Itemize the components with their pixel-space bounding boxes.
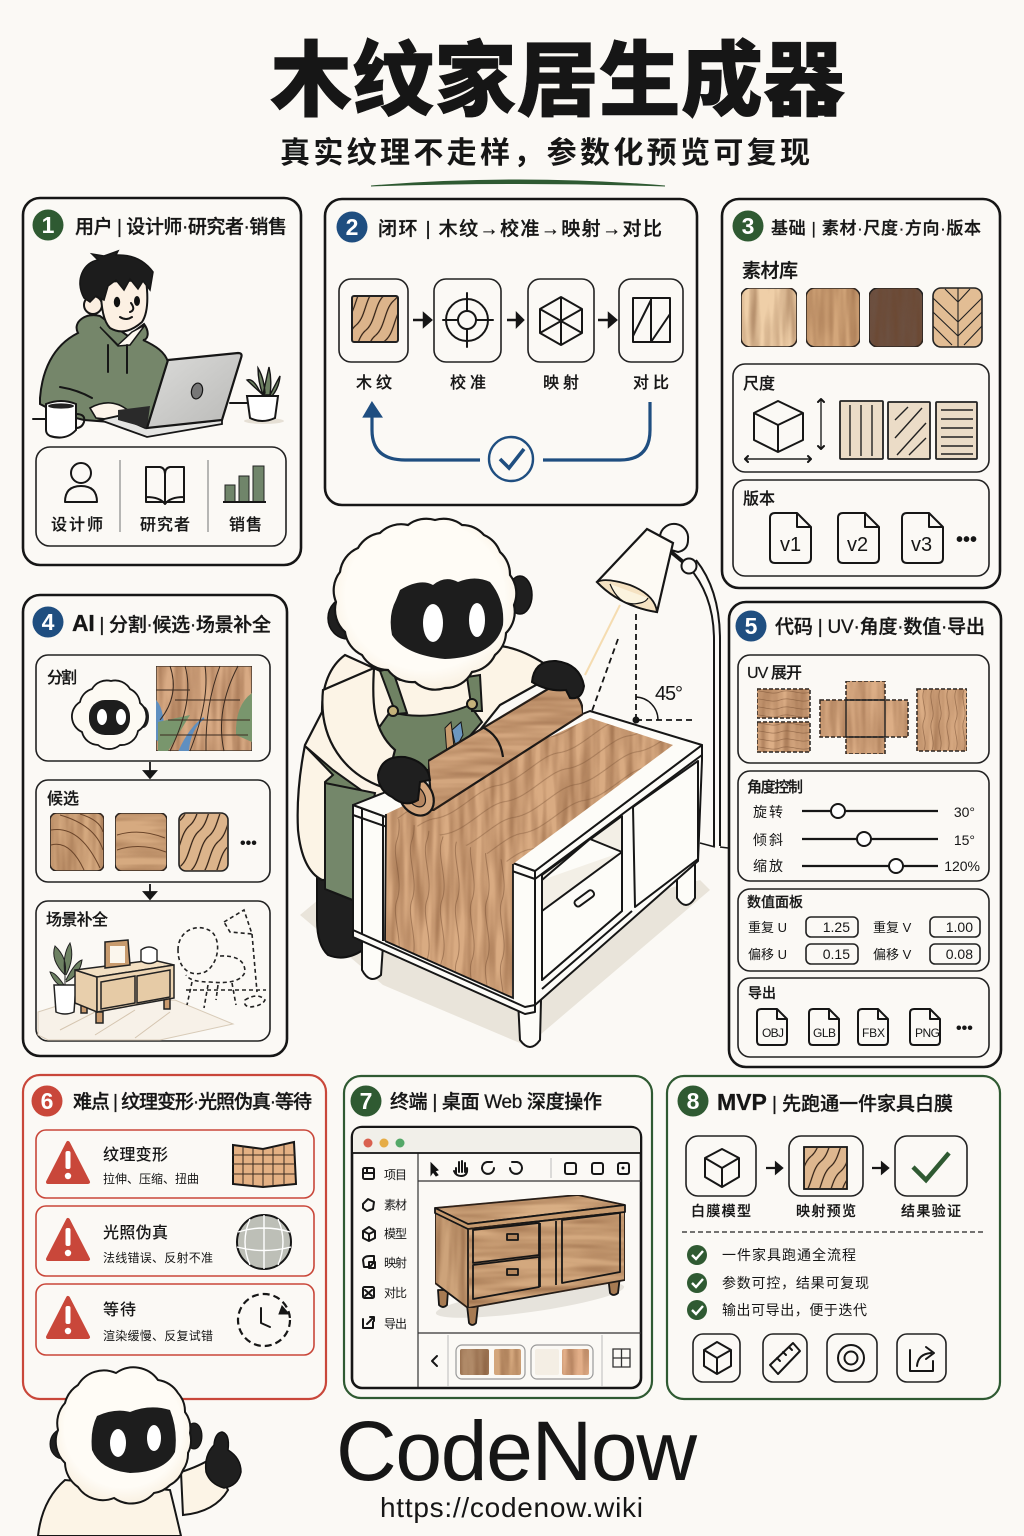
- step: compare: [619, 279, 683, 392]
- badge 2: 2: [346, 214, 358, 240]
- photo frame: [105, 940, 130, 968]
- vase: [141, 947, 157, 964]
- arrow: [766, 1163, 782, 1173]
- angle marker: [592, 614, 695, 724]
- box scene: [36, 901, 270, 1041]
- box angle controls: 30°: [954, 804, 975, 820]
- box UV: [738, 655, 989, 763]
- box export: OBJ: [762, 1026, 784, 1040]
- sidebar: 导出: [384, 1317, 407, 1331]
- checklist: 参数可控，结果可复现: [722, 1275, 869, 1291]
- box numeric: 偏移 V: [873, 947, 912, 962]
- badge 6: [32, 1086, 62, 1116]
- logo: CodeNow: [336, 1404, 697, 1498]
- checklist: 输出可导出，便于迭代: [722, 1302, 867, 1318]
- window dots: [364, 1138, 404, 1148]
- title: 木纹家居生成器: [270, 36, 845, 127]
- sheep ears: [328, 576, 532, 639]
- box segment: 分割: [47, 669, 77, 687]
- box angle controls: 120%: [944, 858, 980, 874]
- row: waiting: 渲染缓慢、反复试错: [103, 1328, 213, 1343]
- heading 1: 用户 | 设计师·研究者·销售: [75, 216, 287, 238]
- sheep head wool: [334, 519, 516, 690]
- arrow: [144, 762, 156, 778]
- box candidates: 候选: [47, 790, 79, 808]
- box numeric: 0.15: [823, 946, 850, 962]
- heading 8: MVP | 先跑通一件家具白膜: [717, 1089, 953, 1115]
- row: fake lighting: 法线错误、反射不准: [103, 1250, 213, 1265]
- step: mapping preview: [789, 1136, 863, 1219]
- row: fake lighting: 光照伪真: [103, 1224, 168, 1242]
- mascot thumb hand: [206, 1432, 241, 1488]
- step: calibrate: [434, 279, 501, 392]
- sidebar: 项目: [384, 1168, 407, 1182]
- mascot face: [92, 1407, 176, 1473]
- material swatches: [741, 288, 982, 347]
- box scene: 场景补全: [46, 910, 108, 929]
- step: map: 映射: [543, 374, 579, 392]
- box export: FBX: [862, 1026, 885, 1040]
- cabinet legs: [362, 850, 695, 1047]
- box numeric: 1.00: [946, 919, 973, 935]
- box candidates: •••: [240, 835, 257, 852]
- plant: [50, 943, 82, 1014]
- badge 8: 8: [687, 1088, 700, 1114]
- box angle controls: [738, 771, 989, 881]
- loop arrow: [365, 402, 650, 460]
- mascot arm: [181, 1458, 228, 1515]
- heading 2: 闭环 | 木纹→校准→映射→对比: [378, 218, 662, 240]
- icon: bars: [223, 466, 266, 502]
- heading 4: AI | 分割·候选·场景补全: [72, 610, 271, 636]
- mascot: thumbs up sheep: [38, 1367, 241, 1536]
- panel 5: code: [729, 602, 1001, 1067]
- badge 7: [350, 1086, 382, 1116]
- step: wood: 木纹: [356, 374, 392, 392]
- box angle controls: 角度控制: [747, 779, 803, 796]
- rug: [38, 1000, 233, 1040]
- box numeric: [738, 889, 989, 971]
- box candidates: [36, 780, 270, 882]
- box UV: UV 展开: [747, 665, 802, 682]
- box export: 导出: [748, 985, 776, 1001]
- box export: GLB: [813, 1026, 836, 1040]
- badge 5: [736, 610, 766, 642]
- step: calibrate: 校准: [450, 373, 486, 392]
- label researcher: 研究者: [140, 515, 190, 534]
- box angle controls: 倾斜: [753, 832, 783, 848]
- cabinet shell: [353, 711, 702, 1047]
- app window: [352, 1127, 641, 1388]
- badge 3: [732, 210, 764, 242]
- toolbar icons: [431, 1161, 629, 1176]
- subtitle: 真实纹理不走样，参数化预览可复现: [280, 137, 810, 170]
- arrow: [144, 884, 156, 899]
- tool buttons: [693, 1334, 946, 1382]
- check circle: [489, 437, 533, 481]
- heading 6: 难点 | 纹理变形·光照伪真·等待: [73, 1091, 312, 1113]
- box angle controls: 缩放: [753, 858, 783, 874]
- step: wood: [339, 279, 408, 392]
- badge 5: 5: [745, 613, 758, 639]
- badge 7: 7: [360, 1088, 372, 1114]
- step: compare: 对比: [633, 374, 669, 392]
- wood veneer: [384, 718, 673, 1000]
- sheep hand lower: [378, 757, 430, 803]
- box versions: 版本: [743, 490, 775, 508]
- badge 6: 6: [41, 1088, 53, 1114]
- sheep legs: [317, 870, 363, 958]
- sheep hand upper: [532, 661, 584, 698]
- wood roll: [391, 686, 583, 822]
- panel 7: terminal: [344, 1076, 652, 1398]
- step: white model: 白膜模型: [691, 1203, 751, 1219]
- cabinet right face: [535, 745, 702, 1005]
- label material library: 素材库: [742, 260, 798, 282]
- box versions: [733, 480, 989, 576]
- box versions: v3: [911, 534, 932, 556]
- apron: [305, 668, 482, 900]
- angle marker: 45°: [655, 683, 683, 705]
- mascot wool: [56, 1367, 191, 1503]
- badge 1: 1: [42, 212, 55, 238]
- thumbnail strip: [432, 1345, 630, 1379]
- heading 3: 基础 | 素材·尺度·方向·版本: [771, 218, 981, 238]
- label sales: 销售: [229, 516, 262, 534]
- mascot ears: [50, 1423, 202, 1459]
- dashed chair: [178, 910, 266, 1008]
- box export: •••: [956, 1020, 973, 1037]
- box angle controls: 旋转: [753, 804, 783, 820]
- row: texture distortion: [36, 1130, 314, 1198]
- brush underline: [371, 180, 665, 186]
- sheep arm: [322, 668, 395, 788]
- panel 4: AI: [23, 595, 287, 1056]
- sheep body: [298, 646, 545, 880]
- cabinet: [75, 960, 174, 1023]
- row: fake lighting: [36, 1206, 314, 1276]
- floor lamp: [597, 524, 728, 848]
- row: waiting: 等待: [103, 1301, 136, 1319]
- badge 8: [678, 1086, 708, 1116]
- badge 3: 3: [742, 213, 754, 239]
- row: texture distortion: 纹理变形: [103, 1145, 168, 1164]
- badge 2: [336, 212, 368, 242]
- heading 5: 代码 | UV·角度·数值·导出: [775, 616, 985, 638]
- panel 1: users: [23, 198, 301, 565]
- box export: [738, 978, 989, 1057]
- sidebar: 映射: [384, 1255, 407, 1270]
- role strip: [36, 447, 286, 546]
- arrow: [507, 314, 523, 326]
- box segment: [36, 655, 270, 761]
- box numeric: 0.08: [946, 946, 973, 962]
- badge 4: 4: [42, 609, 55, 635]
- segmented texture: [156, 666, 252, 751]
- icon: designer: [65, 463, 97, 502]
- box versions: v1: [780, 534, 801, 556]
- panel 8: MVP: [667, 1076, 1000, 1399]
- icon: book: [146, 467, 184, 504]
- step: verify: 结果验证: [901, 1203, 961, 1219]
- checklist: [687, 1245, 869, 1320]
- box scale: 尺度: [743, 374, 775, 393]
- box angle controls: 15°: [954, 832, 975, 848]
- box numeric: 偏移 U: [748, 947, 787, 962]
- box scale: [733, 364, 989, 472]
- mini sheep: [72, 680, 149, 749]
- box export: PNG: [915, 1026, 940, 1040]
- row: texture distortion: 拉伸、压缩、扭曲: [103, 1171, 199, 1186]
- row: waiting: [36, 1284, 314, 1355]
- sidebar: [363, 1168, 407, 1331]
- arrow: [413, 314, 431, 326]
- panel 2: loop: [325, 199, 697, 505]
- heading 7: 终端 | 桌面 Web 深度操作: [390, 1091, 602, 1113]
- cabinet left face: [353, 805, 535, 1014]
- sidebar: 模型: [384, 1227, 407, 1241]
- label designer: 设计师: [51, 516, 103, 534]
- sidebar: 素材: [384, 1198, 407, 1212]
- arrow: [872, 1163, 888, 1173]
- box numeric: 数值面板: [747, 894, 803, 910]
- box numeric: 重复 V: [873, 920, 912, 935]
- badge 4: [32, 606, 64, 638]
- panel 3: basics: [722, 199, 1000, 588]
- box numeric: 1.25: [823, 919, 850, 935]
- panel 6: challenges: [23, 1075, 326, 1399]
- floor shadow: [300, 880, 710, 1046]
- step: white model: [686, 1136, 756, 1219]
- sidebar: 对比: [384, 1286, 407, 1300]
- step: mapping preview: 映射预览: [796, 1203, 856, 1219]
- box versions: •••: [956, 529, 977, 551]
- illustration: designer at laptop: [33, 251, 284, 438]
- sheep face: [391, 578, 503, 659]
- arrow: [598, 314, 616, 326]
- central illustration: sheep applying wood veneer to cabinet: [298, 519, 728, 1047]
- checklist: 一件家具跑通全流程: [722, 1247, 856, 1263]
- mascot body: [38, 1480, 181, 1536]
- box versions: v2: [847, 534, 868, 556]
- viewport furniture: [434, 1195, 626, 1325]
- box numeric: 重复 U: [748, 920, 787, 935]
- step: map: [528, 279, 594, 392]
- step: verify: [895, 1136, 967, 1219]
- badge 1: [32, 210, 64, 240]
- url: https://codenow.wiki: [380, 1492, 643, 1523]
